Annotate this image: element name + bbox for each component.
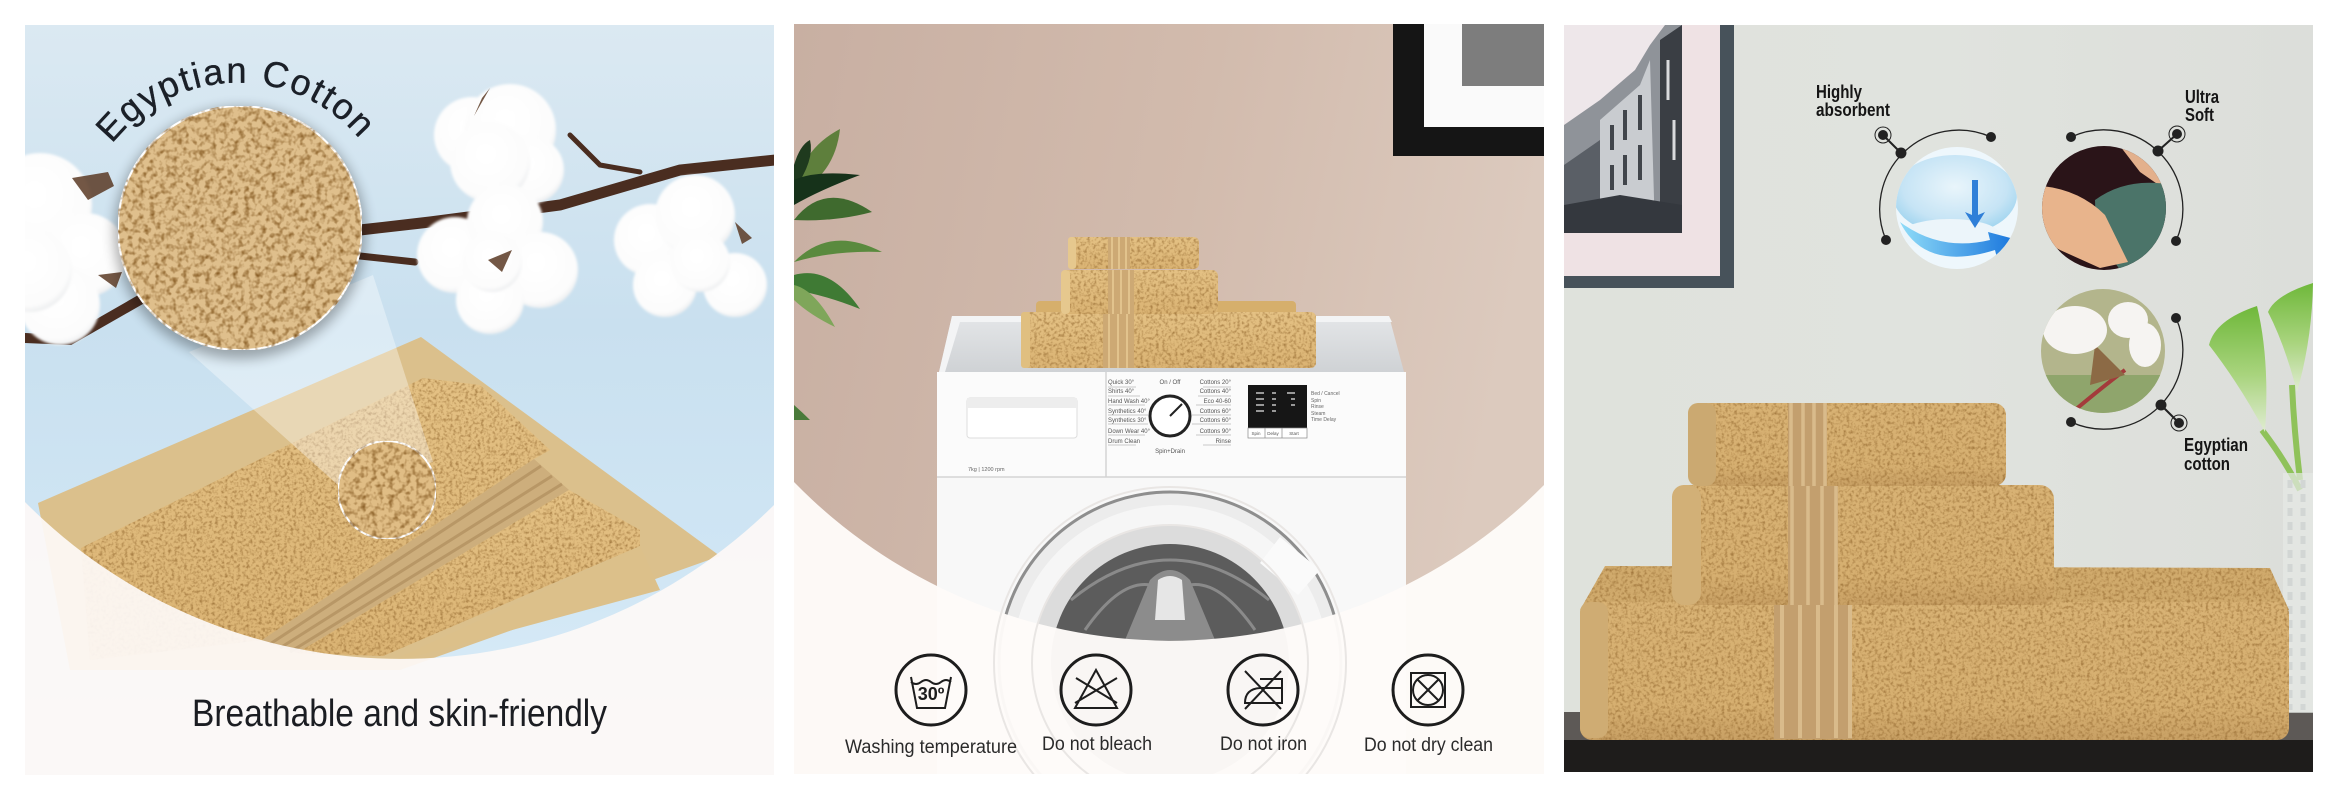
towel corner [38, 337, 720, 670]
wall photo frame [1560, 20, 1734, 288]
care labels: Do not bleach [1042, 734, 1152, 755]
program labels: Synthetics 30° [1108, 418, 1147, 424]
feature labels: Highly [1816, 82, 1862, 102]
icon: do not dry clean [1393, 655, 1463, 725]
care labels: Washing temperature [845, 737, 1017, 758]
display: Delay [1267, 431, 1279, 436]
bottom towel [1580, 566, 2289, 740]
program labels: Hand Wash 40° [1108, 399, 1150, 405]
feature: highly absorbent [1875, 127, 2018, 269]
icon: washing temperature: 30º [918, 684, 945, 704]
program labels: On / Off [1160, 380, 1181, 386]
middle towel [1672, 485, 2054, 605]
feature: egyptian cotton [2041, 289, 2187, 431]
program labels: Drum Clean [1108, 439, 1140, 445]
program labels: Cottons 60° [1200, 409, 1232, 415]
program labels: Cottons 60° [1200, 418, 1232, 424]
heading: egyptian cotton curved: Egyptian Cotton [95, 62, 370, 142]
display [1248, 385, 1340, 438]
display: Steam [1311, 411, 1325, 417]
care labels [845, 736, 1492, 757]
panel: towel set features [1560, 20, 2315, 772]
program labels: Shirts 40° [1108, 389, 1135, 395]
cotton bolls [0, 84, 767, 345]
cotton branch [25, 135, 775, 340]
care icons [896, 655, 1463, 725]
display: Start [1289, 431, 1299, 436]
top towel [1688, 403, 2006, 486]
care labels: Do not dry clean [1364, 735, 1493, 756]
vase and calla plant [2209, 283, 2315, 713]
program labels: Rinse [1216, 439, 1232, 445]
display: Bed / Cancel [1311, 391, 1340, 397]
icon: do not iron [1228, 655, 1298, 725]
caption: Breathable and skin-friendly [192, 693, 607, 735]
program labels: Spin+Drain [1155, 449, 1185, 455]
door and drum [1004, 490, 1336, 641]
feature labels: cotton [2184, 454, 2230, 474]
control panel [937, 372, 1406, 477]
large magnified terry circle [114, 106, 366, 359]
display: Spin [1251, 431, 1261, 436]
icon: do not bleach [1061, 655, 1131, 725]
shelf [1564, 712, 2313, 772]
program labels: Down Wear 40° [1108, 429, 1151, 435]
program labels: Quick 30° [1108, 380, 1135, 386]
ghost door outline [994, 487, 1346, 800]
program labels: Synthetics 40° [1108, 409, 1147, 415]
plant [794, 129, 882, 420]
program labels: Eco 40-60 [1204, 399, 1232, 405]
feature labels: Ultra [2185, 87, 2220, 107]
icon: washing temperature [896, 655, 966, 725]
feature: ultra soft [2042, 126, 2185, 270]
small magnifier circle [338, 441, 436, 539]
selector dial [1150, 396, 1190, 436]
program labels: Cottons 40° [1200, 389, 1232, 395]
display: Time Delay [1311, 417, 1337, 423]
feature labels [1816, 82, 2248, 474]
program labels: Cottons 20° [1200, 380, 1232, 386]
bottom white arc [25, 502, 774, 775]
care labels: Do not iron [1220, 734, 1307, 755]
detergent drawer [967, 398, 1077, 438]
wall picture frame [1393, 20, 1549, 156]
feature labels: absorbent [1816, 100, 1890, 120]
display: Rinse [1311, 404, 1324, 410]
feature labels: Soft [2185, 105, 2214, 125]
program labels: Cottons 90° [1200, 429, 1232, 435]
folded towels [1021, 237, 1316, 368]
magnifier cone [189, 275, 433, 485]
feature labels: Egyptian [2184, 435, 2248, 455]
control panel: 7kg | 1200 rpm [968, 467, 1005, 473]
bottom white arc [794, 482, 1544, 774]
washing machine [937, 316, 1406, 641]
display: Spin [1311, 398, 1321, 404]
program labels [1108, 380, 1232, 455]
panel: egyptian cotton [25, 25, 774, 734]
panel: washing care [794, 20, 1549, 800]
